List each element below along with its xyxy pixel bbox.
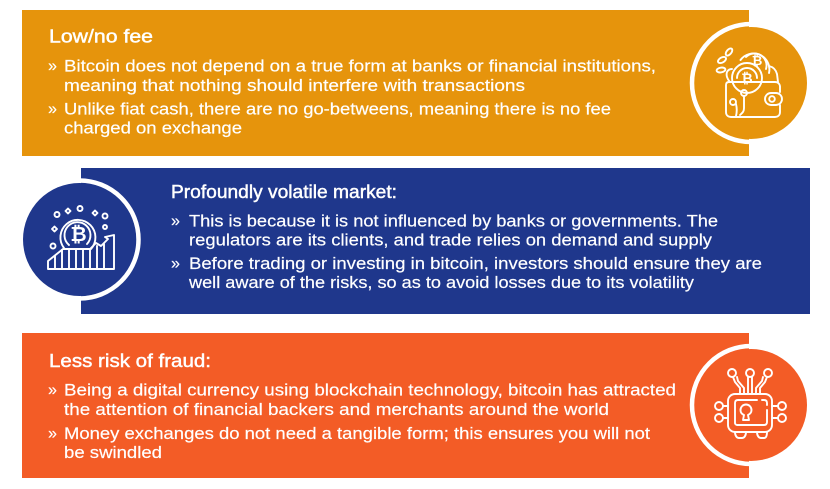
text block: low fee bullets: Bitcoin does not depend on a true form at banks or financial institutions,	[64, 58, 656, 76]
text block: low fee bullets: »	[48, 100, 57, 118]
heading: low/no fee: Low/no fee	[49, 26, 153, 46]
text block: low fee bullets: Unlike fiat cash, there are no go-betweens, meaning there is no fee	[64, 100, 611, 118]
text block: volatile market bullets	[171, 212, 762, 292]
text block: fraud bullets: be swindled	[64, 444, 162, 462]
text block: fraud bullets	[48, 381, 676, 462]
text block: low fee bullets: meaning that nothing should interfere with transactions	[64, 77, 525, 95]
icon: wallet with bitcoins	[692, 24, 810, 142]
heading: less risk of fraud: Less risk of fraud:	[49, 350, 211, 371]
text block: fraud bullets: »	[48, 424, 57, 442]
panel: low/no fee	[22, 10, 749, 156]
text block: volatile market bullets: »	[171, 212, 180, 230]
text block: volatile market bullets: This is because it is not influenced by banks or governments. The	[189, 212, 718, 230]
text block: fraud bullets: Money exchanges do not need a tangible form; this ensures you will not	[64, 425, 651, 443]
heading: profoundly volatile market: Profoundly volatile market:	[171, 181, 397, 202]
icon: digital safe chip	[692, 346, 810, 464]
panel: less risk of fraud	[22, 333, 749, 478]
text block: volatile market bullets: regulators are its clients, and trade relies on demand and supply	[189, 232, 713, 250]
text block: low fee bullets	[48, 57, 656, 138]
icon: wallet with bitcoins: ₿	[741, 70, 753, 86]
text block: volatile market bullets: »	[171, 254, 180, 272]
text block: low fee bullets: »	[48, 57, 57, 75]
text block: low fee bullets: charged on exchange	[64, 120, 242, 138]
icon: bitcoin rising chart	[20, 180, 138, 298]
text block: fraud bullets: the attention of financial backers and merchants around the world	[64, 401, 609, 419]
text block: fraud bullets: »	[48, 381, 57, 399]
icon: wallet with bitcoins: ₿	[752, 53, 762, 68]
icon: bitcoin rising chart: ₿	[70, 224, 87, 246]
text block: volatile market bullets: well aware of the risks, so as to avoid losses due to its volatility	[188, 274, 695, 292]
text block: volatile market bullets: Before trading or investing in bitcoin, investors should ensure they are	[189, 255, 762, 273]
text block: fraud bullets: Being a digital currency using blockchain technology, bitcoin has attracted	[64, 382, 676, 400]
panel: profoundly volatile market	[81, 168, 810, 314]
